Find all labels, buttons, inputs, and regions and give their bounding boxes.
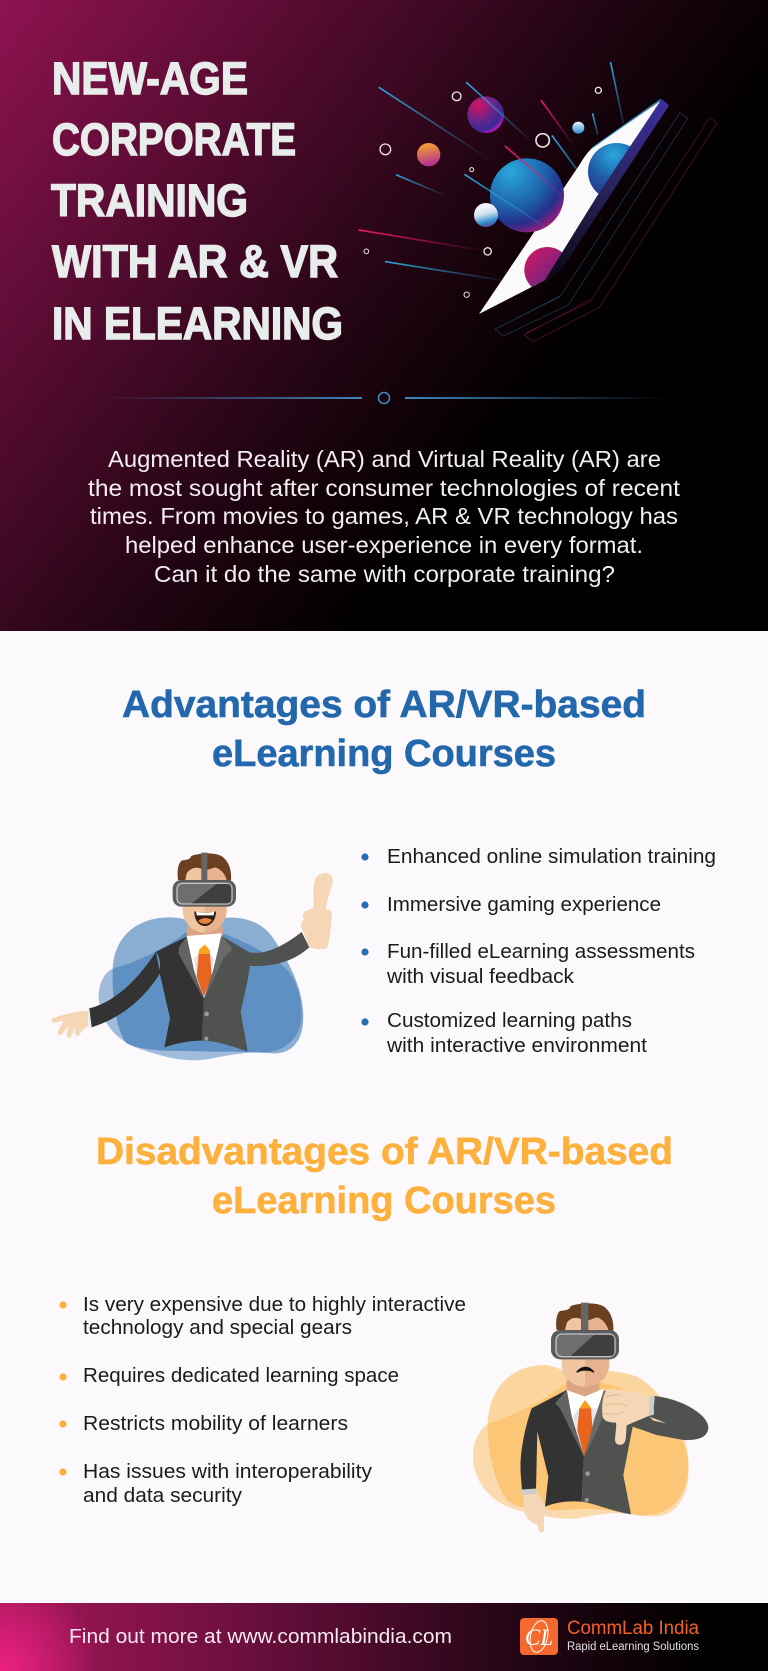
bullet items: Is very expensive due to highly interactive — [83, 1293, 466, 1316]
heading: advantages — [122, 684, 646, 775]
intro paragraph: times. From movies to games, AR & VR technology has — [90, 503, 678, 529]
heading: disadvantages: eLearning Courses — [212, 1180, 556, 1222]
panel: footer — [0, 1603, 768, 1671]
illustration: unhappy man with VR headset, thumbs down — [473, 1303, 708, 1533]
head — [551, 1303, 619, 1397]
footer call to action: Find out more at www.commlabindia.com — [69, 1625, 452, 1648]
bullet items — [59, 1293, 466, 1507]
left arm and hand — [52, 952, 160, 1038]
intro paragraph: Can it do the same with corporate training? — [154, 561, 615, 587]
bullet items: Has issues with interoperability — [83, 1460, 373, 1483]
title: NEW-AGE — [52, 53, 248, 104]
lower hand — [523, 1491, 552, 1533]
bullet items: and data security — [83, 1484, 243, 1507]
bullet items: with interactive environment — [386, 1034, 647, 1057]
title: WITH AR & VR — [52, 236, 338, 287]
thumbs-down hand — [602, 1389, 655, 1445]
bullet items: Restricts mobility of learners — [83, 1412, 348, 1435]
bullet items: with visual feedback — [386, 965, 575, 988]
suit — [156, 933, 250, 1052]
title — [51, 53, 343, 349]
intro paragraph: the most sought after consumer technologies of recent — [88, 475, 681, 501]
panel: hero — [0, 0, 768, 631]
bullet items: Fun-filled eLearning assessments — [387, 940, 695, 963]
intro paragraph: Augmented Reality (AR) and Virtual Reality (AR) are — [108, 446, 661, 472]
bullet items: Immersive gaming experience — [387, 893, 661, 916]
bullet items: Enhanced online simulation training — [387, 845, 716, 868]
bullet items: technology and special gears — [83, 1316, 352, 1339]
heading: advantages: eLearning Courses — [212, 733, 556, 775]
logo icon: CL — [525, 1625, 553, 1650]
thumbs-up hand — [301, 873, 333, 949]
logo wordmark: Rapid eLearning Solutions — [567, 1641, 699, 1653]
logo wordmark — [567, 1618, 699, 1653]
title: TRAINING — [51, 175, 248, 226]
head — [173, 853, 236, 947]
intro paragraph — [88, 446, 681, 587]
heading: disadvantages — [96, 1131, 673, 1222]
divider with circle — [100, 392, 668, 404]
intro paragraph: helped enhance user-experience in every format. — [125, 532, 643, 558]
list: disadvantages — [59, 1293, 466, 1507]
logo icon — [520, 1618, 558, 1655]
heading: advantages: Advantages of AR/VR-based — [122, 684, 646, 726]
bullet items — [361, 845, 716, 1057]
list: advantages — [361, 845, 716, 1057]
suit — [520, 1388, 708, 1514]
illustration: happy man with VR headset, thumbs up — [52, 853, 333, 1060]
bullet items: Customized learning paths — [387, 1009, 632, 1032]
title: CORPORATE — [52, 114, 296, 165]
bullet items: Requires dedicated learning space — [83, 1364, 399, 1387]
title: IN ELEARNING — [52, 298, 343, 349]
logo wordmark: CommLab India — [567, 1618, 699, 1639]
illustration: AR tablet with spheres — [359, 63, 717, 342]
heading: disadvantages: Disadvantages of AR/VR-based — [96, 1131, 673, 1173]
